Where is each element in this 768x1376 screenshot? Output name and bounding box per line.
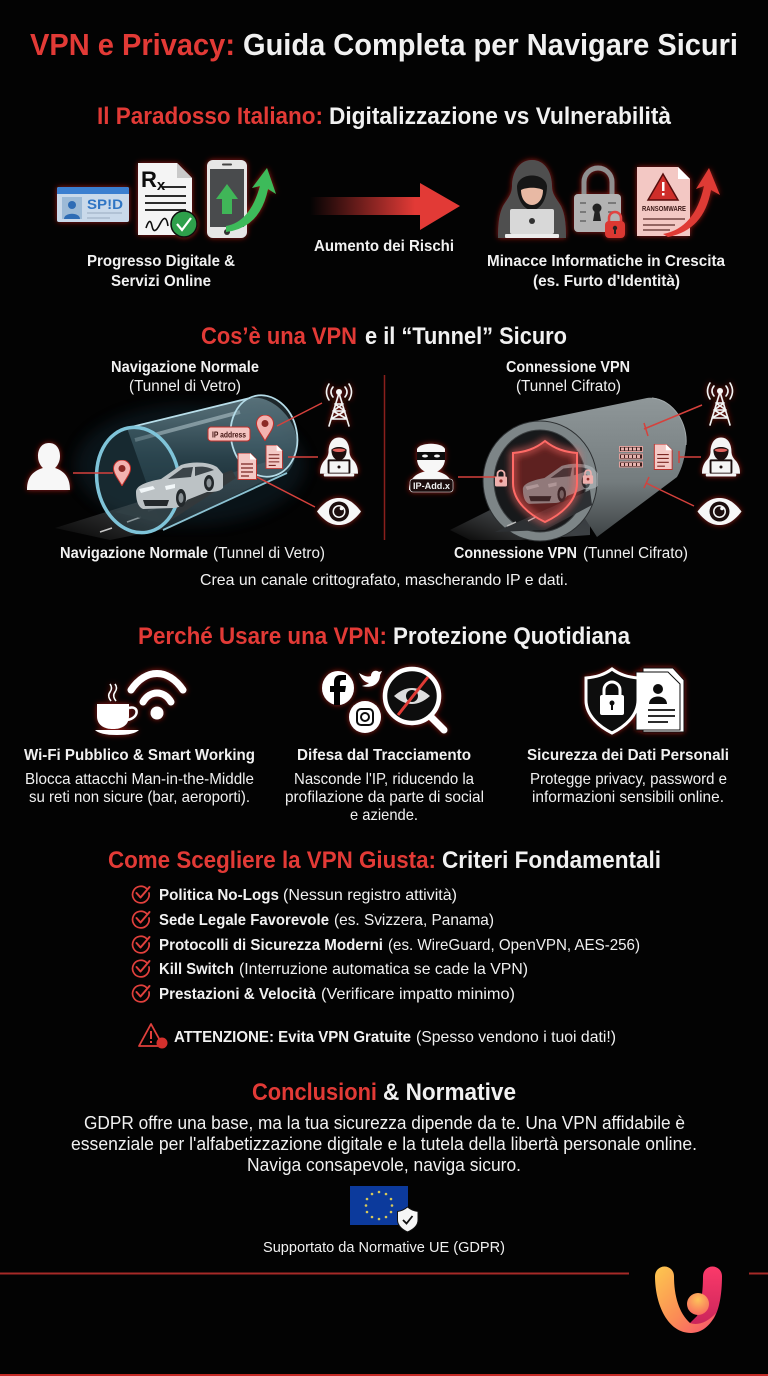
icon: car dark bbox=[523, 464, 598, 504]
icon: hacker bbox=[702, 438, 740, 476]
warning text bbox=[174, 1029, 616, 1046]
caption: minacce informatiche: Minacce Informatiche in Crescita bbox=[487, 253, 725, 270]
caption: aumento dei rischi: Aumento dei Rischi bbox=[314, 238, 454, 255]
icon: lucchetti bbox=[574, 168, 625, 238]
heading: perché usare una vpn bbox=[138, 623, 631, 650]
road inside bbox=[115, 470, 236, 524]
road inside vpn bbox=[495, 490, 592, 532]
text: conclusioni: Naviga consapevole, naviga sicuro. bbox=[247, 1155, 521, 1175]
text: sicurezza dei dati: Protegge privacy, password e bbox=[530, 771, 727, 788]
icon: burglar: IP-Add.x bbox=[413, 481, 450, 491]
text: sicurezza dei dati: informazioni sensibili online. bbox=[532, 789, 724, 806]
item: no-logs: Politica No-Logs bbox=[159, 887, 279, 904]
label: connessione vpn bbox=[506, 359, 630, 395]
text: canale crittografato: Crea un canale crittografato, mascherando IP e dati. bbox=[200, 572, 568, 589]
item: prestazioni: Prestazioni & Velocità bbox=[159, 986, 316, 1003]
icon: eye bbox=[317, 498, 361, 525]
heading: come scegliere: Come Scegliere la VPN Giusta: bbox=[108, 847, 436, 874]
item: protocolli: (es. WireGuard, OpenVPN, AES-256) bbox=[388, 937, 640, 954]
icon: smartphone with green arrow bbox=[207, 160, 276, 238]
text: wi-fi pubblico: Blocca attacchi Man-in-the-Middle bbox=[25, 771, 254, 788]
panel: tunnel cifrato bbox=[409, 383, 742, 541]
icon: scudo e documento bbox=[586, 668, 684, 733]
heading: il paradosso italiano: Digitalizzazione vs Vulnerabilità bbox=[329, 103, 672, 130]
caption: navigazione normale: (Tunnel di Vetro) bbox=[213, 545, 325, 562]
icon: location pin 2 bbox=[256, 415, 274, 441]
item: no-logs bbox=[133, 886, 457, 904]
text: difesa dal tracciamento: profilazione da parte di social bbox=[285, 789, 484, 806]
road bbox=[55, 457, 285, 540]
item: kill switch: Kill Switch bbox=[159, 961, 234, 978]
icon: document bbox=[654, 444, 672, 470]
icon: person bbox=[27, 443, 70, 490]
caption: navigazione normale bbox=[60, 545, 325, 562]
text: sicurezza dei dati bbox=[527, 747, 729, 806]
icon: warning bbox=[139, 1024, 168, 1048]
item: prestazioni bbox=[133, 985, 515, 1003]
text: wi-fi pubblico: su reti non sicure (bar, aeroporti). bbox=[29, 789, 250, 806]
heading: cos'è una vpn: e il “Tunnel” Sicuro bbox=[365, 323, 567, 350]
caption: connessione vpn: (Tunnel Cifrato) bbox=[583, 545, 688, 562]
label: connessione vpn: Connessione VPN bbox=[506, 359, 630, 376]
icon: tower bbox=[326, 384, 352, 426]
text: difesa dal tracciamento: e aziende. bbox=[350, 807, 418, 824]
badge: IP address: IP address bbox=[212, 430, 246, 440]
icon: prescription document bbox=[138, 163, 197, 237]
label: navigazione normale: Navigazione Normale bbox=[111, 359, 259, 376]
icon: documento ransomware: RANSOMWARE bbox=[642, 206, 686, 213]
text: difesa dal tracciamento: Difesa dal Tracciamento bbox=[297, 747, 471, 764]
item: sede legale: (es. Svizzera, Panama) bbox=[334, 912, 494, 929]
heading: perché usare una vpn: Protezione Quotidiana bbox=[393, 623, 631, 650]
arrow: aumento dei rischi bbox=[310, 183, 460, 230]
caption: minacce informatiche: (es. Furto d'Identità) bbox=[533, 273, 680, 290]
icon: documents bbox=[238, 445, 282, 480]
icon: caffè e wifi bbox=[95, 674, 183, 735]
heading: perché usare una vpn: Perché Usare una VPN: bbox=[138, 623, 387, 650]
text: conclusioni: essenziale per l'alfabetizzazione digitale e la tutela della libertà personale online. bbox=[71, 1134, 697, 1154]
icon: hacker bbox=[320, 438, 358, 476]
text: conclusioni: GDPR offre una base, ma la tua sicurezza dipende da te. Una VPN affidabile è bbox=[84, 1113, 685, 1133]
icon: location pin bbox=[114, 460, 130, 486]
title: VPN e Privacy: bbox=[30, 27, 235, 62]
item: sede legale bbox=[133, 911, 494, 929]
text: wi-fi pubblico: Wi-Fi Pubblico & Smart Working bbox=[24, 747, 255, 764]
caption: connessione vpn bbox=[454, 545, 688, 562]
caption: progresso digitale: Progresso Digitale & bbox=[87, 253, 235, 270]
icon: SPID card bbox=[57, 187, 129, 222]
item: protocolli: Protocolli di Sicurezza Moderni bbox=[159, 937, 383, 954]
icon: glowing shield bbox=[513, 441, 577, 522]
icon: prescription document: R bbox=[141, 167, 157, 192]
label: navigazione normale: (Tunnel di Vetro) bbox=[129, 378, 241, 395]
checklist bbox=[133, 886, 640, 1003]
front ring bbox=[88, 421, 188, 539]
icon: tower bbox=[708, 383, 732, 425]
text: difesa dal tracciamento: Nasconde l'IP, riducendo la bbox=[294, 771, 474, 788]
icon: encrypted data bbox=[620, 446, 642, 467]
caption: connessione vpn: Connessione VPN bbox=[454, 545, 577, 562]
icon: eye bbox=[698, 498, 742, 525]
icon: car bbox=[136, 463, 223, 509]
title bbox=[30, 27, 738, 62]
icon: prescription document: x bbox=[157, 177, 166, 194]
heading: cos'è una vpn: Cos’è una VPN bbox=[201, 323, 357, 350]
icon: documento ransomware bbox=[637, 167, 720, 237]
icon: padlock left bbox=[495, 470, 507, 486]
icon: social e lente bbox=[322, 669, 444, 733]
text: wi-fi pubblico bbox=[24, 747, 255, 806]
item: kill switch bbox=[133, 960, 528, 978]
heading: come scegliere bbox=[108, 847, 661, 874]
icon: burglar bbox=[409, 444, 453, 492]
heading: come scegliere: Criteri Fondamentali bbox=[442, 847, 661, 874]
text: difesa dal tracciamento bbox=[285, 747, 484, 824]
icon: padlock right bbox=[583, 470, 593, 484]
heading: il paradosso italiano: Il Paradosso Italiano: bbox=[97, 103, 323, 130]
panel: paradosso bbox=[57, 160, 725, 290]
caption: navigazione normale: Navigazione Normale bbox=[60, 545, 208, 562]
road bbox=[450, 490, 590, 540]
item: no-logs: (Nessun registro attività) bbox=[283, 887, 457, 904]
item: prestazioni: (Verificare impatto minimo) bbox=[321, 986, 515, 1003]
concrete tube bbox=[530, 398, 686, 537]
caption: minacce informatiche bbox=[487, 253, 725, 290]
heading: cos'è una vpn bbox=[201, 323, 567, 350]
icon: SPID card: SP!D bbox=[87, 196, 123, 212]
heading: conclusioni bbox=[252, 1079, 516, 1106]
title: Guida Completa per Navigare Sicuri bbox=[243, 27, 738, 62]
warning text: (Spesso vendono i tuoi dati!) bbox=[416, 1029, 616, 1046]
label: connessione vpn: (Tunnel Cifrato) bbox=[516, 378, 621, 395]
text: conclusioni bbox=[71, 1113, 697, 1175]
heading: il paradosso italiano bbox=[97, 103, 672, 130]
heading: conclusioni: Conclusioni bbox=[252, 1079, 377, 1106]
text: sicurezza dei dati: Sicurezza dei Dati Personali bbox=[527, 747, 729, 764]
item: protocolli bbox=[133, 936, 640, 954]
icon: bandiera UE con scudo bbox=[350, 1186, 418, 1232]
warning text: ATTENZIONE: Evita VPN Gratuite bbox=[174, 1029, 411, 1046]
badge: IP address bbox=[208, 427, 250, 441]
logo bbox=[655, 1266, 722, 1333]
caption: progresso digitale: Servizi Online bbox=[111, 273, 211, 290]
icon: shield fill bbox=[513, 441, 577, 522]
item: kill switch: (Interruzione automatica se cade la VPN) bbox=[239, 961, 528, 978]
panel: tunnel di vetro bbox=[27, 384, 361, 540]
caption: supportato da normative: Supportato da Normative UE (GDPR) bbox=[263, 1239, 505, 1256]
label: navigazione normale bbox=[111, 359, 259, 395]
item: sede legale: Sede Legale Favorevole bbox=[159, 912, 329, 929]
icon: hacker con laptop bbox=[498, 160, 566, 238]
glass tube bbox=[127, 398, 297, 530]
heading: conclusioni: & Normative bbox=[383, 1079, 516, 1106]
caption: progresso digitale bbox=[87, 253, 235, 290]
